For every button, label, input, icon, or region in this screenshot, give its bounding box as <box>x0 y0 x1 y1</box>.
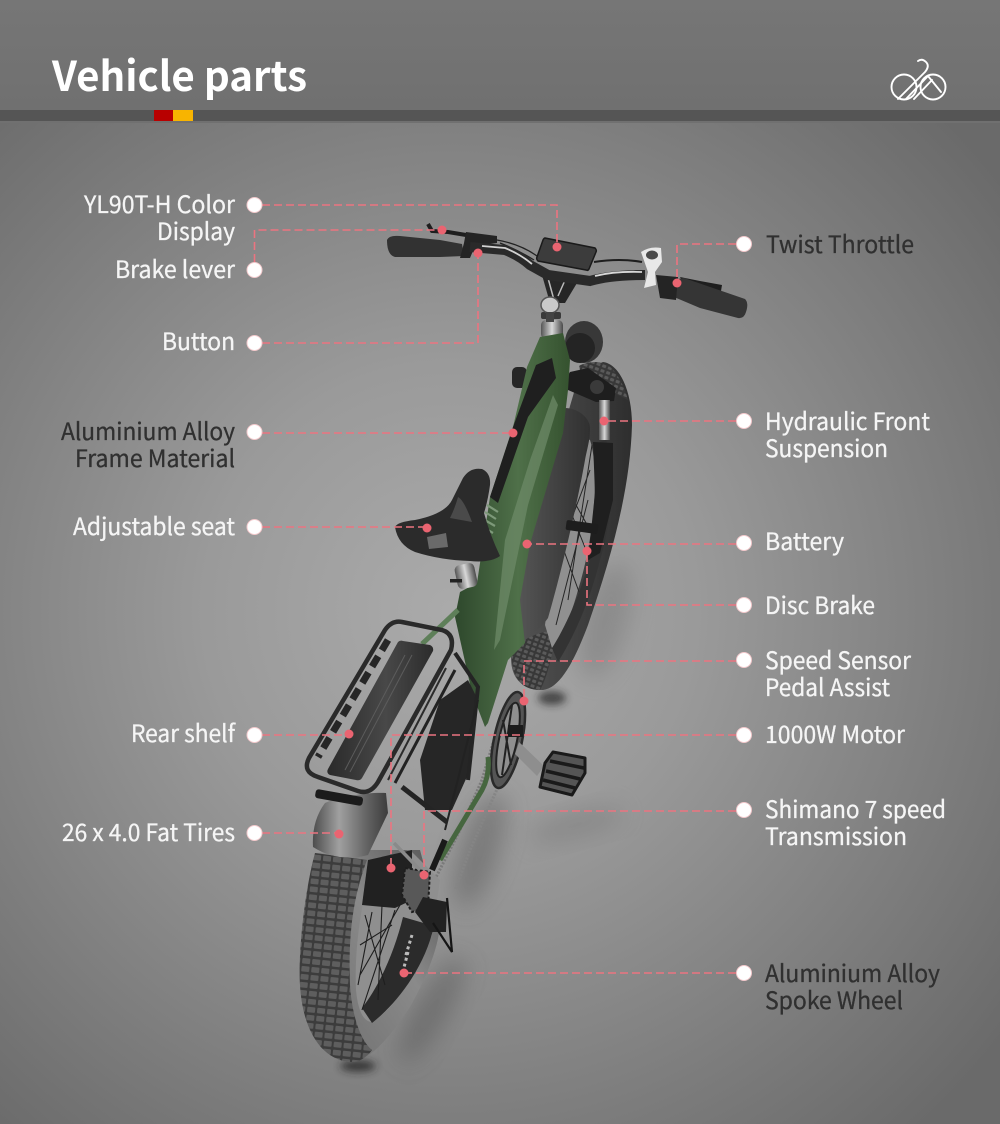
left controls <box>460 232 497 258</box>
callout: 26 x 4.0 Fat Tires <box>62 813 344 848</box>
callout: Rear shelf: Rear shelf <box>131 714 236 749</box>
callout: Battery: Battery <box>765 522 844 557</box>
rear rim <box>362 917 434 1023</box>
callout: Aluminium Alloy Spoke Wheel: Aluminium Alloy <box>765 954 940 989</box>
callout: Hydraulic Front Suspension <box>600 402 930 464</box>
callout: Brake lever <box>115 226 446 285</box>
callout: Aluminium Alloy Frame Material: Aluminium Alloy <box>61 412 235 447</box>
header bar <box>0 110 1000 123</box>
front tyre tread bottom <box>512 631 556 690</box>
front rim <box>552 440 612 662</box>
tray <box>327 641 433 780</box>
title: Vehicle parts <box>51 43 307 103</box>
battery cover <box>490 358 556 503</box>
right lever mount <box>641 248 662 288</box>
front wheel <box>511 362 632 690</box>
callout: Disc Brake <box>582 546 875 621</box>
handlebar <box>387 224 747 318</box>
stem and head tube <box>541 275 580 339</box>
rear tyre sidewall <box>300 850 440 1062</box>
callout: Rear shelf <box>131 714 354 749</box>
frame highlight <box>494 395 558 650</box>
front tyre tread top <box>579 362 628 400</box>
right grip <box>672 278 747 318</box>
spokes <box>358 905 400 1010</box>
rear fender <box>313 793 388 858</box>
rear rack <box>307 622 455 806</box>
callout: 26 x 4.0 Fat Tires: 26 x 4.0 Fat Tires <box>62 813 235 848</box>
fork <box>512 367 616 560</box>
seat stay tube <box>422 610 458 644</box>
saddle <box>395 469 500 561</box>
callout: Aluminium Alloy Frame Material <box>61 412 518 474</box>
chainstays <box>432 757 488 870</box>
frame <box>455 333 570 727</box>
callout: Aluminium Alloy Spoke Wheel: Spoke Wheel <box>765 981 903 1016</box>
callout: Disc Brake: Disc Brake <box>765 586 875 621</box>
crank and chainring <box>432 689 544 890</box>
rear hub <box>362 850 412 908</box>
kickstand <box>433 898 452 952</box>
callout: Adjustable seat <box>73 507 432 542</box>
header band <box>0 0 1000 110</box>
cassette <box>402 868 430 912</box>
callout: Shimano 7 speed Transmission: Shimano 7 speed <box>765 790 946 825</box>
callout: Battery <box>522 522 844 557</box>
callout: YL90T-H Color Display: Display <box>157 212 235 247</box>
callout: Aluminium Alloy Spoke Wheel <box>400 954 940 1016</box>
callout: Brake lever: Brake lever <box>115 250 236 285</box>
display <box>537 238 596 270</box>
callout: YL90T-H Color Display: YL90T-H Color <box>83 185 236 220</box>
callout: Button <box>162 248 482 357</box>
front fender <box>505 408 590 650</box>
callout: 1000W Motor: 1000W Motor <box>765 715 906 750</box>
callout: Speed Sensor Pedal Assist: Speed Sensor <box>765 641 912 676</box>
rack rails <box>318 640 388 757</box>
bike illustration <box>300 224 747 1072</box>
seat post <box>450 562 478 590</box>
callout: Twist Throttle: Twist Throttle <box>766 225 914 260</box>
left brake lever <box>428 224 466 235</box>
front wheel opening <box>545 430 595 648</box>
left grip <box>387 236 464 257</box>
rear wheel <box>300 850 447 1062</box>
derailleur <box>415 897 447 932</box>
floor shadows <box>340 556 642 1072</box>
battery stripes <box>481 505 498 533</box>
right brake lever <box>680 277 722 291</box>
cables <box>497 240 537 260</box>
callout: Button: Button <box>162 322 235 357</box>
callout: Shimano 7 speed Transmission <box>420 790 946 880</box>
bar <box>470 247 645 281</box>
callout: Hydraulic Front Suspension: Suspension <box>765 429 888 464</box>
callout: Speed Sensor Pedal Assist <box>520 641 912 706</box>
callout: 1000W Motor <box>386 715 906 872</box>
headlight <box>565 321 603 363</box>
rear stays <box>394 653 478 870</box>
right controls <box>656 275 678 300</box>
behind-rack body <box>420 680 478 810</box>
rear tyre tread <box>300 853 372 1062</box>
callout: Hydraulic Front Suspension: Hydraulic Front <box>765 402 930 437</box>
rear wheel opening <box>356 850 440 1022</box>
icon: bicycle <box>892 60 946 100</box>
callout: Shimano 7 speed Transmission: Transmission <box>765 817 907 852</box>
callout: Adjustable seat: Adjustable seat <box>73 507 235 542</box>
callout: Twist Throttle <box>672 225 914 288</box>
rack clamp <box>315 789 364 806</box>
callout: Speed Sensor Pedal Assist: Pedal Assist <box>765 668 890 703</box>
pedal <box>540 752 585 795</box>
callout: YL90T-H Color Display <box>83 185 562 252</box>
callout: Aluminium Alloy Frame Material: Frame Material <box>75 439 235 474</box>
rack frame <box>307 622 452 792</box>
